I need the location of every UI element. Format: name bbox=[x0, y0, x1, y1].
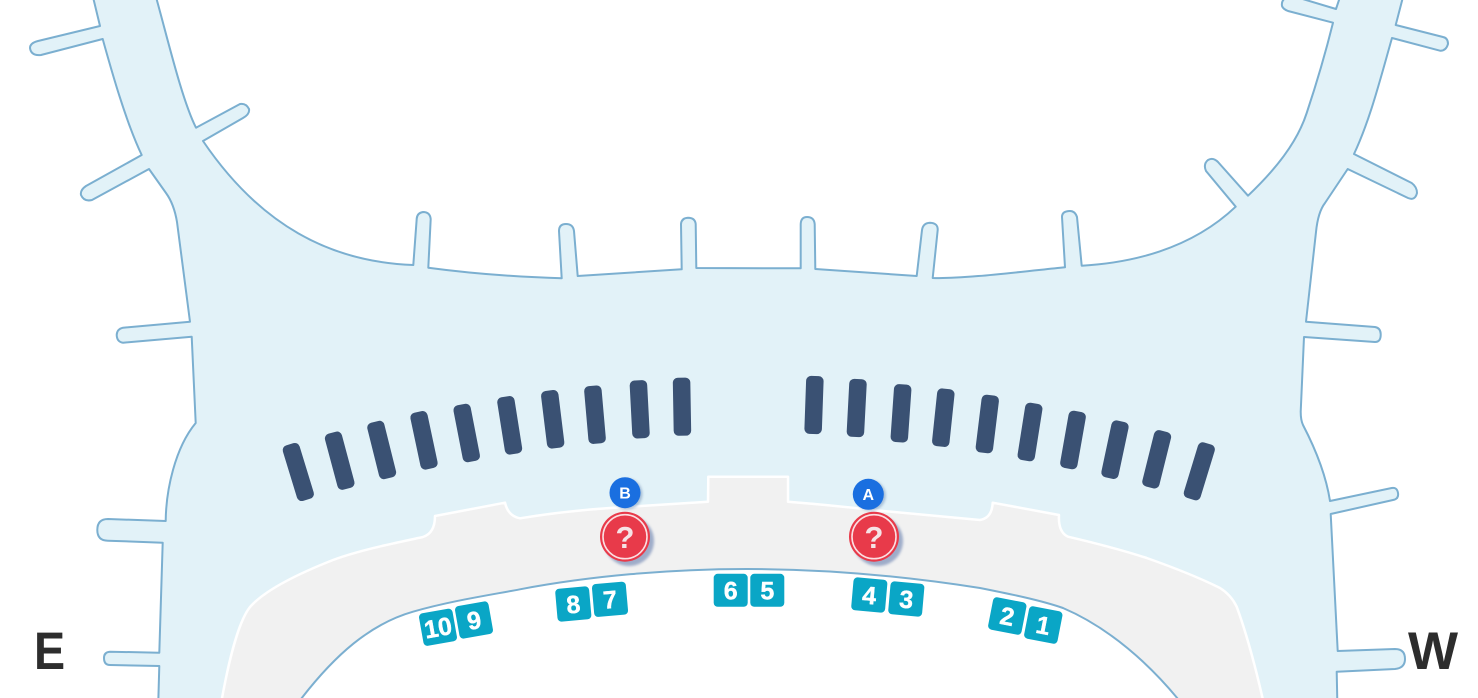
gate tile 1: 1 bbox=[1034, 611, 1053, 641]
gate tile 6: 6 bbox=[724, 577, 738, 605]
gate tile 8: 8 bbox=[565, 590, 582, 620]
gate tile 4: 4 bbox=[861, 581, 877, 611]
check-in counters: east group bbox=[281, 378, 691, 502]
gate tile 5 bbox=[750, 574, 784, 607]
gate tile 5: 5 bbox=[760, 577, 774, 605]
inner courtyard bbox=[301, 569, 1178, 698]
gate tile 2: 2 bbox=[998, 602, 1017, 632]
badge: entrance A: A bbox=[863, 487, 875, 504]
gate tile 7: 7 bbox=[602, 586, 618, 615]
gate tile 9 bbox=[454, 601, 494, 639]
gate tile 10: 10 bbox=[422, 612, 454, 644]
compass label E: E bbox=[34, 621, 65, 681]
compass label W: W bbox=[1408, 622, 1458, 681]
icon: information marker A bbox=[849, 512, 903, 566]
gate tile 8 bbox=[555, 586, 592, 622]
check-in counters: west group bbox=[804, 376, 1216, 502]
gate tile 9: 9 bbox=[465, 606, 483, 636]
gate tile 7 bbox=[592, 581, 628, 617]
icon: information marker B bbox=[600, 512, 654, 566]
concourse grey floor bbox=[222, 477, 1263, 698]
badge: entrance B: B bbox=[619, 486, 631, 502]
gate tile 3: 3 bbox=[898, 585, 914, 615]
gate tile 2 bbox=[987, 597, 1027, 635]
badge: entrance A bbox=[853, 479, 886, 511]
badge: entrance B bbox=[610, 477, 642, 510]
gate tile 10 bbox=[418, 608, 458, 647]
gate tile 3 bbox=[888, 581, 925, 617]
gate tile 4 bbox=[851, 577, 888, 613]
gate tile 1 bbox=[1023, 606, 1063, 644]
icon: information marker A: ? bbox=[865, 520, 883, 555]
gate tile 6 bbox=[714, 574, 748, 607]
icon: information marker B: ? bbox=[616, 520, 634, 555]
